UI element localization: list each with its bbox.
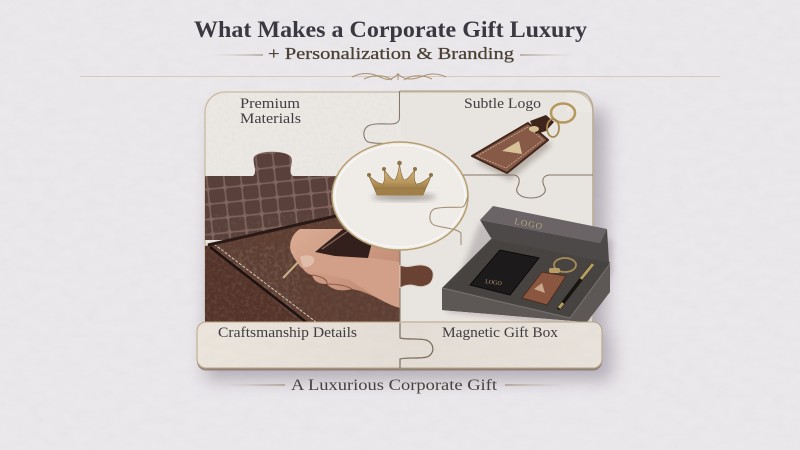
lid logo: LOGO	[514, 216, 544, 231]
croc leather tab and band	[205, 152, 336, 240]
subtitle with rules: + Personalization & Branding	[268, 44, 515, 63]
label: magnetic gift box: Magnetic Gift Box	[442, 325, 559, 341]
icon: gold crown	[367, 161, 436, 200]
icon: magnetic gift box	[442, 206, 612, 328]
index finger	[298, 254, 400, 308]
puzzle drop shadow	[205, 110, 612, 380]
puzzle notch: brown right tab	[400, 265, 433, 288]
notebook seam	[210, 247, 306, 322]
icon: leather keychain	[472, 104, 575, 180]
title: What Makes a Corporate Gift Luxury	[194, 17, 588, 42]
panel: premium materials and subtle logo base	[205, 91, 593, 332]
pen nib	[282, 262, 298, 279]
puzzle seams	[364, 91, 593, 323]
label: subtle logo: Subtle Logo	[464, 96, 541, 112]
dark notebook leather	[205, 214, 400, 322]
black card holder: LOGO	[485, 279, 503, 287]
panel: craftsmanship leather photo	[205, 148, 400, 322]
label: premium materials: Materials	[240, 111, 301, 127]
brown tag in box	[522, 258, 576, 305]
footer caption with rules: A Luxurious Corporate Gift	[291, 377, 498, 394]
pen body	[315, 229, 374, 258]
label: premium materials	[240, 96, 301, 127]
tray base	[442, 238, 610, 322]
label: craftsmanship details: Craftsmanship Details	[218, 325, 357, 341]
fingernail	[300, 255, 314, 267]
thumb and fingers	[290, 220, 400, 308]
black card holder	[470, 250, 539, 295]
ornamental divider	[80, 73, 720, 80]
pen in box	[559, 264, 593, 308]
box lid	[480, 206, 607, 243]
panel: bottom label strip	[197, 322, 602, 370]
centre medallion	[332, 142, 468, 250]
infographic canvas	[80, 21, 720, 394]
lower left leather	[205, 246, 300, 322]
label: premium materials: Premium	[240, 96, 301, 112]
